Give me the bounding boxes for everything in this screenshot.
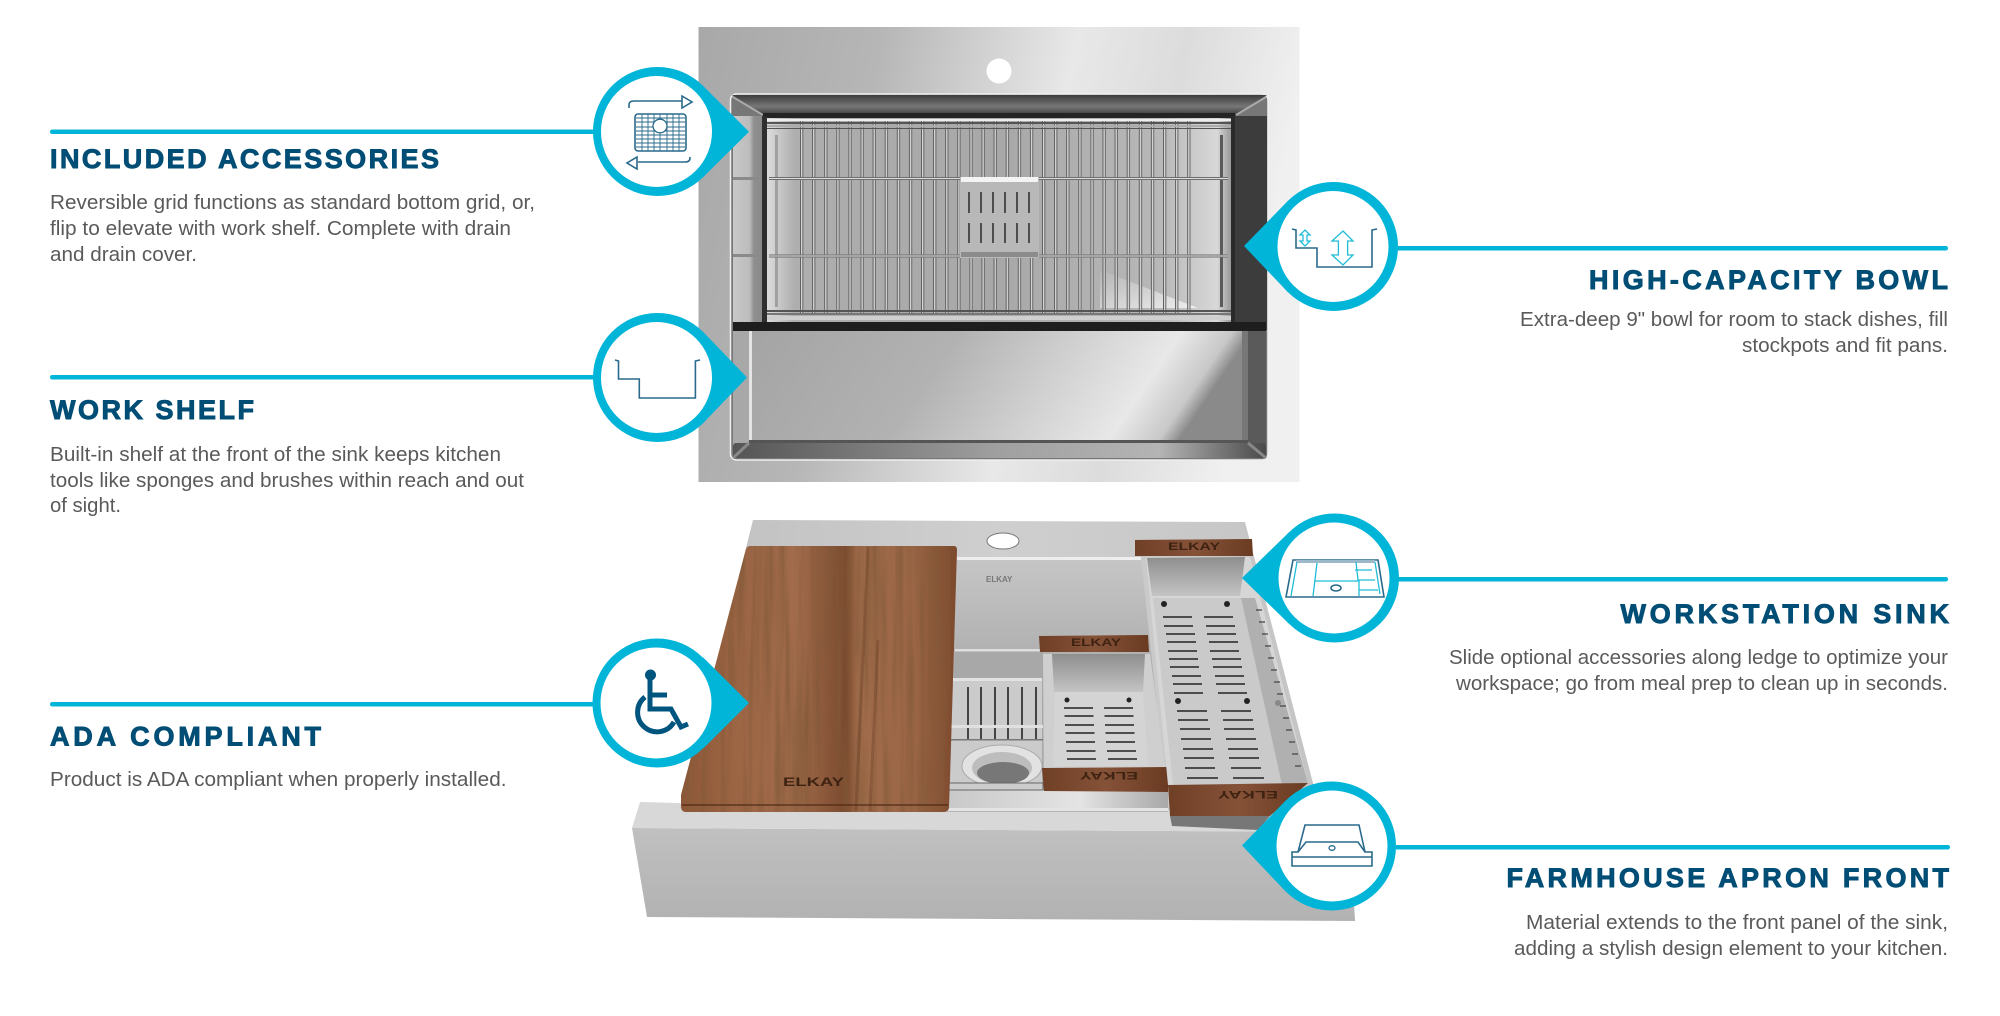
drain cover [960, 177, 1039, 258]
large basket: ELKAY [1168, 541, 1221, 553]
photo: top-down sink with grid [698, 27, 1300, 482]
callout: high-capacity bowl [1244, 182, 1948, 357]
callout: ADA compliant [50, 638, 749, 791]
cutting board [680, 545, 958, 813]
description: tools like sponges and brushes within reach and out [50, 470, 524, 492]
description: adding a stylish design element to your kitchen. [1514, 938, 1948, 960]
description: of sight. [50, 495, 121, 517]
marker with icon: deep bowl [1244, 182, 1398, 311]
large basket: ELKAY [1217, 788, 1278, 800]
small basket [1039, 635, 1168, 792]
callout: work shelf [50, 313, 747, 517]
photo: farmhouse sink with accessories [632, 520, 1355, 921]
description [50, 192, 535, 266]
heading: INCLUDED ACCESSORIES [50, 144, 439, 174]
small grid and drain [948, 649, 1043, 790]
description: stockpots and fit pans. [1742, 335, 1948, 357]
callout: workstation sink [1242, 514, 1950, 695]
description: Slide optional accessories along ledge to optimize your [1449, 647, 1948, 669]
description: Material extends to the front panel of the sink, [1526, 912, 1948, 934]
marker with icon: reversible grid [593, 67, 749, 196]
description [1514, 912, 1948, 960]
description [1449, 647, 1948, 695]
callout: included accessories [50, 67, 749, 266]
photo: farmhouse sink with accessories: ELKAY [986, 575, 1013, 584]
description: Reversible grid functions as standard bottom grid, or, [50, 192, 535, 214]
heading: HIGH-CAPACITY BOWL [1589, 265, 1948, 295]
work shelf [749, 331, 1242, 440]
cutting board: ELKAY [783, 775, 844, 789]
description: and drain cover. [50, 244, 197, 266]
small basket: ELKAY [1071, 637, 1122, 649]
large basket [1135, 539, 1308, 830]
description [50, 444, 524, 517]
description: Extra-deep 9" bowl for room to stack dishes, fill [1520, 309, 1948, 331]
marker with icon: wheelchair [592, 638, 749, 768]
small basket: ELKAY [1079, 769, 1138, 781]
marker with icon: apron sink outline [1242, 782, 1396, 910]
description: flip to elevate with work shelf. Complete with drain [50, 218, 511, 240]
marker with icon: workstation outline [1242, 514, 1399, 642]
heading: WORKSTATION SINK [1620, 599, 1950, 629]
heading: FARMHOUSE APRON FRONT [1506, 863, 1950, 893]
description [1520, 309, 1948, 357]
marker with icon: shelf profile [593, 313, 747, 442]
description: workspace; go from meal prep to clean up in seconds. [1455, 673, 1948, 695]
heading: WORK SHELF [50, 395, 254, 425]
description: Built-in shelf at the front of the sink keeps kitchen [50, 444, 501, 466]
heading: ADA COMPLIANT [50, 722, 322, 752]
callout: farmhouse apron front [1242, 782, 1950, 960]
description: Product is ADA compliant when properly installed. [50, 769, 506, 791]
grid rack [762, 116, 1235, 322]
